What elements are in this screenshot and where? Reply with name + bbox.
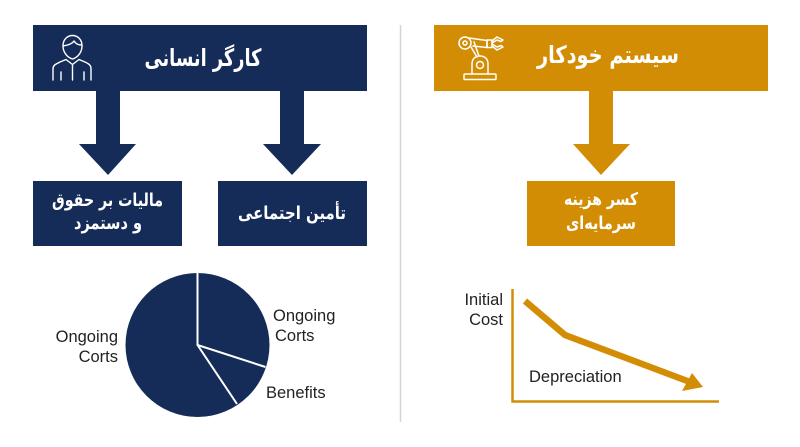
pie label: benefits: Benefits (266, 384, 326, 402)
box: social security (218, 181, 367, 246)
arrow: to social security (263, 91, 321, 175)
arrow: to payroll tax (79, 91, 136, 175)
panel: human worker (33, 25, 367, 246)
icon: worker (53, 36, 91, 80)
box: capital cost deduction (527, 181, 675, 246)
panel: automated system (434, 25, 768, 246)
pie chart (126, 273, 270, 417)
right header title: سیستم خودکار (536, 41, 679, 69)
pie label: ongoing costs right: Ongoing (273, 307, 335, 325)
left header bar (33, 25, 367, 91)
pie label: ongoing costs left: Ongoing (56, 328, 118, 346)
depreciation arrow (525, 301, 703, 391)
box: payroll tax (33, 181, 182, 246)
left header title: کارگر انسانی (144, 44, 262, 72)
box: capital cost deduction: کسر هزینه (564, 190, 639, 210)
arrow: to capital deduction (573, 91, 630, 175)
pie label: ongoing costs right: Corts (275, 327, 314, 345)
box: capital cost deduction: سرمایه‌ای (566, 214, 636, 234)
box: payroll tax: و دستمزد (74, 213, 142, 234)
box: social security: تأمین اجتماعی (238, 201, 346, 224)
icon: robot arm (459, 37, 503, 80)
label: initial cost: Initial (464, 291, 503, 309)
chart axes (512, 289, 719, 402)
right header bar (434, 25, 768, 91)
label: initial cost: Cost (469, 311, 503, 329)
box: payroll tax: مالیات بر حقوق (52, 190, 163, 211)
label: depreciation: Depreciation (529, 368, 622, 386)
depreciation chart (464, 289, 719, 402)
pie label: ongoing costs left: Corts (79, 348, 118, 366)
